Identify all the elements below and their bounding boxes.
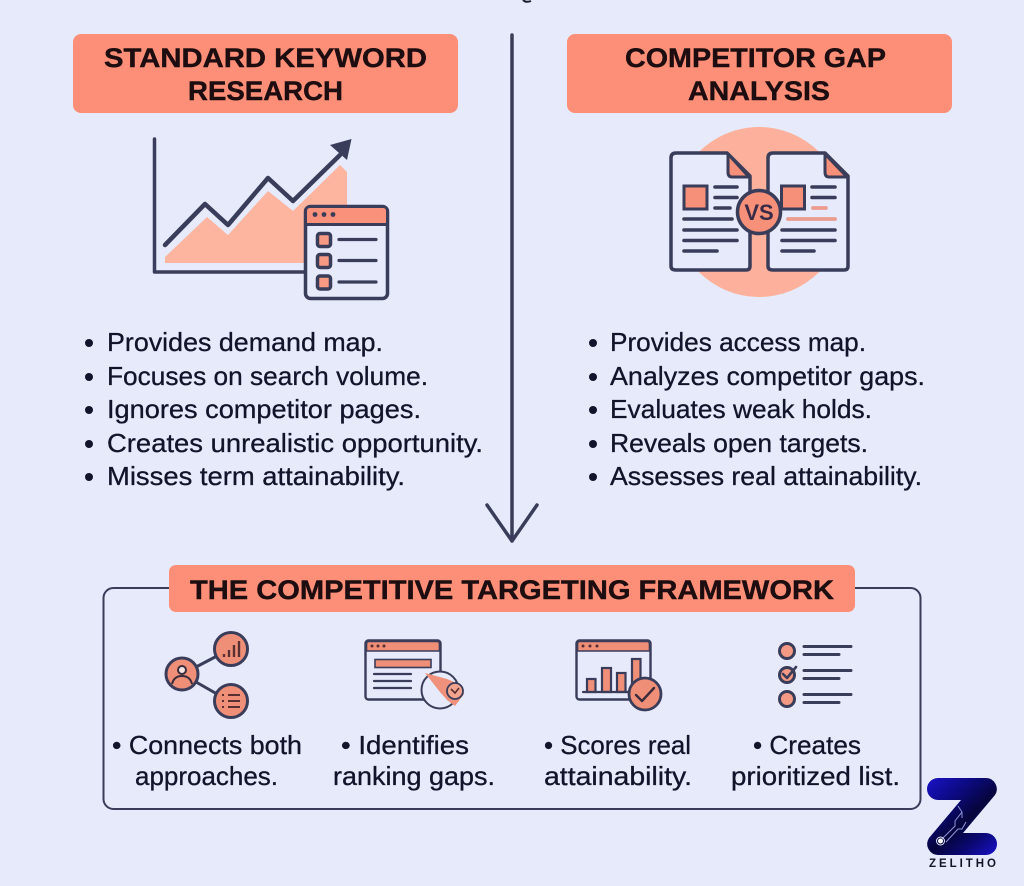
text block: competitor gap analysis bullets: Analyzes competitor gaps. [610, 361, 925, 391]
text block: standard keyword research bullets: Creates unrealistic opportunity. [107, 428, 483, 458]
text block: standard keyword research bullets [85, 327, 483, 491]
text: creates prioritized list [731, 730, 900, 791]
icon: connected nodes [166, 632, 248, 718]
text: creates prioritized list: • Creates [753, 730, 861, 760]
text: identifies ranking gaps: ranking gaps. [333, 761, 495, 791]
text: connects both approaches: • Connects both [112, 730, 302, 760]
panel: competitor gap analysis heading: COMPETITOR GAP [625, 43, 886, 73]
icon: two documents versus: VS [744, 200, 774, 225]
text block: competitor gap analysis bullets: Assesses real attainability. [610, 461, 922, 491]
text block: standard keyword research bullets: Focuses on search volume. [107, 361, 428, 391]
heading: framework banner: THE COMPETITIVE TARGETING FRAMEWORK [190, 575, 835, 605]
logo: Zelitho: ZELITHO [929, 858, 996, 870]
icon: growth chart with list window [154, 139, 388, 298]
text: scores real attainability [544, 730, 692, 791]
text block: competitor gap analysis bullets: Provides access map. [610, 327, 866, 357]
icon: browser with pointing hand [366, 640, 464, 708]
text block: competitor gap analysis bullets: Evaluates weak holds. [610, 394, 872, 424]
icon: two documents versus [671, 127, 848, 297]
text: creates prioritized list: prioritized list. [731, 761, 900, 791]
text: scores real attainability: attainability. [544, 761, 692, 791]
panel: standard keyword research heading: STANDARD KEYWORD [104, 43, 427, 73]
text block: competitor gap analysis bullets [589, 327, 925, 491]
text: identifies ranking gaps: • Identifies [341, 730, 469, 760]
text block: standard keyword research bullets: Misses term attainability. [107, 461, 405, 491]
panel: standard keyword research heading: RESEARCH [188, 76, 343, 106]
panel: competitor gap analysis heading [567, 34, 952, 113]
text block: competitor gap analysis bullets: Reveals open targets. [610, 428, 868, 458]
text: identifies ranking gaps [333, 730, 495, 791]
icon: prioritized checklist [780, 644, 851, 706]
text: scores real attainability: • Scores real [544, 730, 691, 760]
panel: competitor gap analysis heading: ANALYSIS [688, 76, 830, 106]
heading: framework banner [169, 565, 855, 612]
panel: standard keyword research heading [73, 34, 458, 113]
text: connects both approaches [112, 730, 302, 791]
text: connects both approaches: approaches. [135, 761, 278, 791]
panel: competitive targeting framework [104, 565, 920, 809]
logo: Zelitho [927, 778, 997, 870]
arrow: central divider pointing down [487, 35, 537, 541]
icon: scored bar chart window [576, 640, 661, 710]
text block: standard keyword research bullets: Ignores competitor pages. [107, 394, 421, 424]
text block: standard keyword research bullets: Provides demand map. [107, 327, 383, 357]
